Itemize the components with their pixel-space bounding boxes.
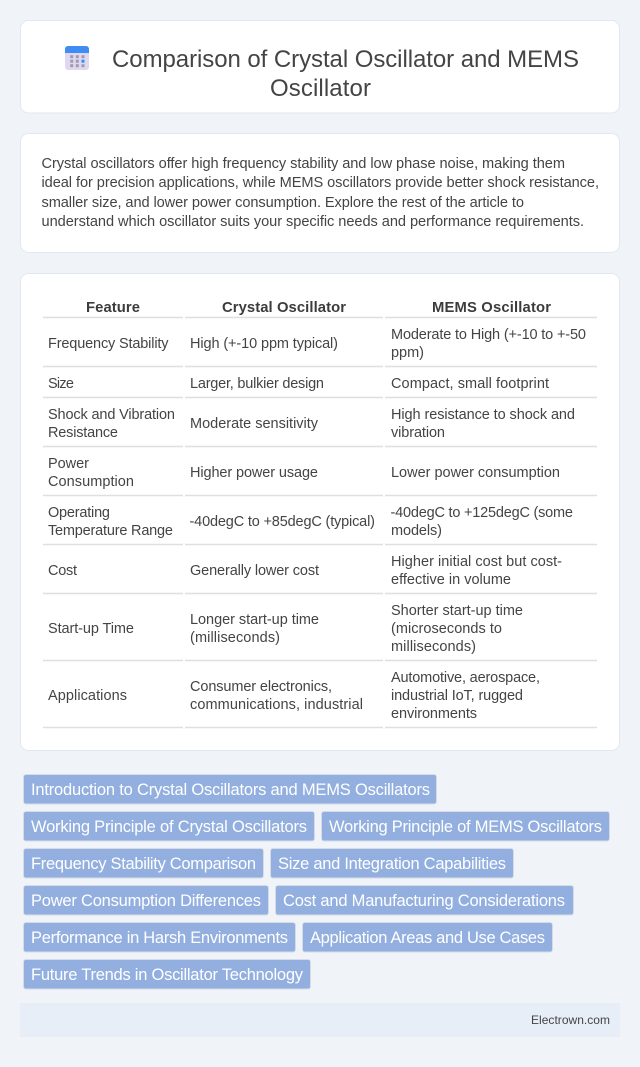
row: shock and vibration resistance: High resistance to shock and <box>391 407 575 423</box>
row: cost: Higher initial cost but cost- <box>391 554 562 570</box>
tag: application areas <box>302 922 552 952</box>
row: cost: Generally lower cost <box>190 563 319 579</box>
title: Oscillator <box>270 75 371 102</box>
row: size: Larger, bulkier design <box>190 376 324 392</box>
tag: power consumption <box>24 886 268 915</box>
table header: MEMS Oscillator <box>432 300 551 316</box>
footer: Electrown.com <box>531 1013 610 1027</box>
row: shock and vibration resistance: Moderate sensitivity <box>190 416 319 432</box>
row: start-up time: Start-up Time <box>48 621 134 637</box>
row: start-up time <box>48 603 523 655</box>
row: frequency stability <box>48 327 586 361</box>
tag: harsh environments: Performance in Harsh Environments <box>31 929 288 947</box>
row: size: Size <box>48 376 74 392</box>
tag: working principle crystal: Working Principle of Crystal Oscillators <box>31 818 307 836</box>
row: frequency stability: Moderate to High (+-10 to +-50 <box>391 327 586 343</box>
row: shock and vibration resistance: Resistance <box>48 425 118 441</box>
tag: frequency stability: Frequency Stability Comparison <box>31 855 256 873</box>
row: frequency stability: ppm) <box>391 345 424 361</box>
row: frequency stability: Frequency Stability <box>48 336 169 352</box>
topic tags <box>24 774 610 989</box>
intro text: smaller size, and lower power consumption. Explore the rest of the article to <box>42 195 524 211</box>
table header: Feature <box>86 300 140 316</box>
tag: size and integration <box>270 848 514 878</box>
panel: comparison table <box>20 274 620 750</box>
row: power consumption: Lower power consumption <box>391 465 560 481</box>
row: cost <box>48 554 562 588</box>
icon: calendar <box>65 46 89 70</box>
tag: introduction: Introduction to Crystal Oscillators and MEMS Oscillators <box>31 781 430 799</box>
tag: harsh environments <box>24 922 296 952</box>
row: applications <box>48 670 540 722</box>
row: applications: Applications <box>48 688 127 704</box>
row: applications: industrial IoT, rugged <box>391 688 523 704</box>
intro text <box>42 156 599 230</box>
row: cost: effective in volume <box>391 572 511 588</box>
row: operating temperature range: -40degC to +85degC (typical) <box>190 514 375 530</box>
tag: size and integration: Size and Integration Capabilities <box>278 855 506 873</box>
row: applications: Consumer electronics, <box>190 679 332 695</box>
row: start-up time: (milliseconds) <box>190 630 280 646</box>
tag: application areas: Application Areas and Use Cases <box>310 929 545 947</box>
row: start-up time: (microseconds to <box>391 621 502 637</box>
intro text: ideal for precision applications, while MEMS oscillators provide better shock resistance, <box>42 175 599 191</box>
tag: power consumption: Power Consumption Differences <box>31 892 261 910</box>
intro text: Crystal oscillators offer high frequency stability and low phase noise, making them <box>42 156 565 172</box>
row: operating temperature range: -40degC to +125degC (some <box>390 505 573 521</box>
tag: future trends: Future Trends in Oscillator Technology <box>31 966 304 984</box>
row: start-up time: Longer start-up time <box>190 612 319 628</box>
row: shock and vibration resistance: vibration <box>391 425 445 441</box>
title <box>112 46 579 102</box>
panel: introduction <box>20 134 620 252</box>
row: power consumption: Power <box>48 456 89 472</box>
title: Comparison of Crystal Oscillator and MEMS <box>112 46 579 73</box>
tag: frequency stability <box>24 848 264 878</box>
row: shock and vibration resistance: Shock and Vibration <box>48 407 175 423</box>
row: applications: Automotive, aerospace, <box>391 670 540 686</box>
tag: working principle mems: Working Principle of MEMS Oscillators <box>329 818 602 836</box>
row: power consumption: Higher power usage <box>190 465 318 481</box>
tag: future trends <box>24 960 310 989</box>
row: applications: communications, industrial <box>190 697 363 713</box>
tag: cost and manufacturing <box>276 886 574 915</box>
row: operating temperature range: Operating <box>48 505 110 521</box>
row: start-up time: Shorter start-up time <box>391 603 523 619</box>
row: applications: environments <box>391 706 477 722</box>
tag: working principle crystal <box>24 812 314 841</box>
table header <box>86 300 551 316</box>
row: frequency stability: High (+-10 ppm typical) <box>190 336 338 352</box>
row: operating temperature range: models) <box>391 523 442 539</box>
row: cost: Cost <box>48 563 77 579</box>
panel: title header <box>20 20 620 113</box>
row: power consumption <box>48 456 560 490</box>
row: start-up time: milliseconds) <box>391 639 476 655</box>
row: operating temperature range <box>48 505 573 539</box>
intro text: understand which oscillator suits your specific needs and performance requirements. <box>42 214 584 230</box>
tag: cost and manufacturing: Cost and Manufacturing Considerations <box>283 892 565 910</box>
row: size: Compact, small footprint <box>391 376 549 392</box>
tag: working principle mems <box>322 812 610 841</box>
row: power consumption: Consumption <box>48 474 134 490</box>
row: shock and vibration resistance <box>48 407 575 441</box>
table header: Crystal Oscillator <box>222 300 346 316</box>
row: operating temperature range: Temperature Range <box>48 523 173 539</box>
tag: introduction <box>24 774 436 804</box>
row: size <box>48 376 549 392</box>
footer <box>20 1003 620 1037</box>
